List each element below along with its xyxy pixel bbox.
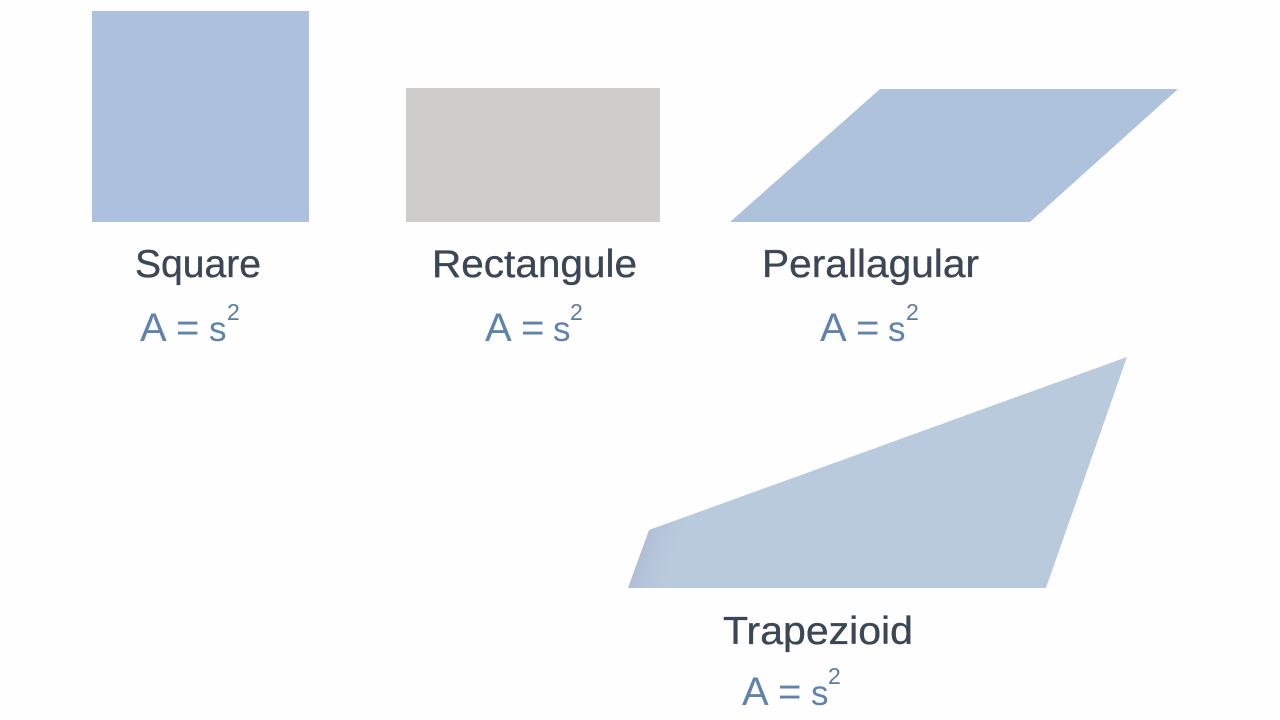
formula: parallelogram: s (888, 310, 906, 349)
formula: square (140, 299, 240, 350)
formula: square: s (209, 310, 226, 349)
formula: square: A= (140, 306, 199, 350)
formula: parallelogram: A= (820, 306, 879, 350)
formula: rectangle (485, 299, 583, 350)
formula: square: 2 (227, 299, 240, 325)
formula: rectangle: 2 (570, 299, 583, 325)
formula: trapezoid (742, 663, 841, 714)
label: Rectangule: Rectangule (432, 243, 637, 286)
shape: trapezoid (628, 357, 1127, 588)
formula: trapezoid: 2 (828, 663, 841, 689)
shape: parallelogram (730, 89, 1178, 222)
formula: parallelogram (820, 299, 919, 350)
shape: square (92, 11, 309, 222)
shape: rectangle (406, 88, 660, 222)
formula: parallelogram: 2 (906, 299, 919, 325)
formula: trapezoid: A= (742, 670, 801, 714)
formula: trapezoid: s (811, 674, 828, 713)
label: Square: Square (135, 243, 261, 286)
formula: rectangle: s (553, 310, 570, 349)
label: Trapezioid: Trapezioid (723, 610, 913, 653)
label: Perallagular: Perallagular (762, 243, 979, 286)
formula: rectangle: A= (485, 306, 544, 350)
